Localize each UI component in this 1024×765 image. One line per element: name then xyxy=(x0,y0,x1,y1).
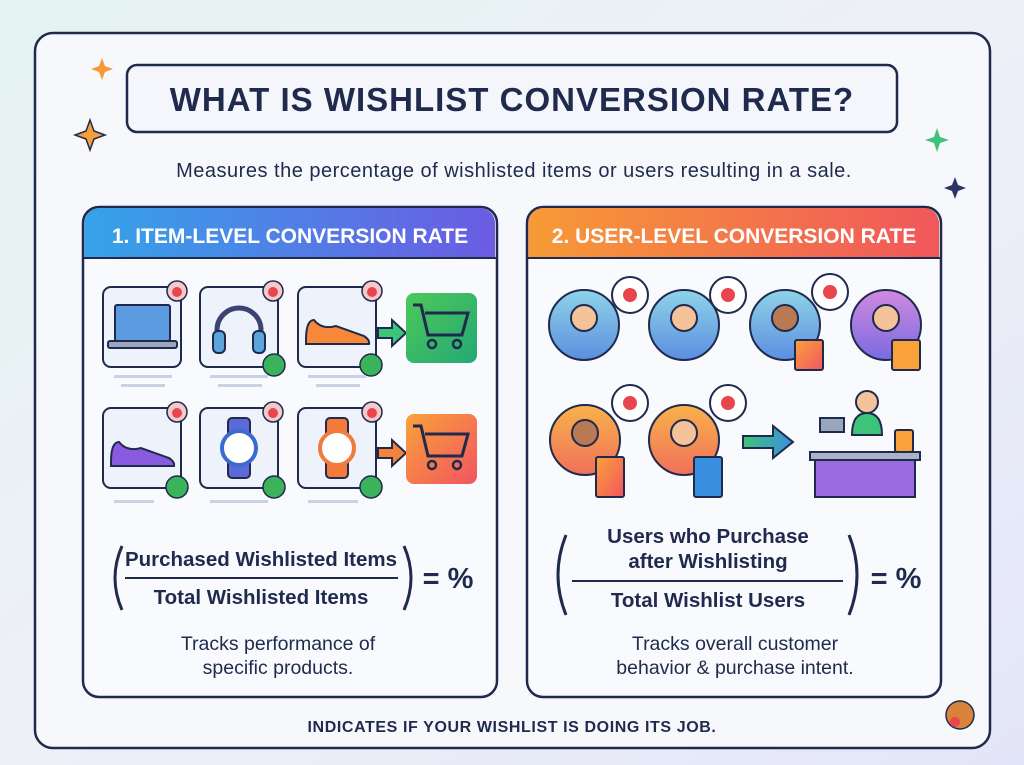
decorative sparkle: navy xyxy=(944,177,966,199)
description: user-level: behavior & purchase intent. xyxy=(616,657,854,679)
product row 2 xyxy=(103,402,477,503)
formula: user-level: Total Wishlist Users xyxy=(611,589,805,612)
panel: user-level xyxy=(527,207,941,697)
formula: item-level: = % xyxy=(423,563,474,595)
formula: user-level xyxy=(558,525,922,615)
panel header: item-level: 1. ITEM-LEVEL CONVERSION RATE xyxy=(112,225,468,248)
panel header: user-level: 2. USER-LEVEL CONVERSION RATE xyxy=(552,225,916,248)
description: item-level: Tracks performance of xyxy=(181,633,375,655)
decorative sparkle: green xyxy=(925,128,949,152)
title box xyxy=(127,65,897,132)
decorative sparkle: orange xyxy=(91,58,113,80)
decorative sparkle: large orange xyxy=(75,120,105,150)
title box: WHAT IS WISHLIST CONVERSION RATE? xyxy=(170,81,854,118)
description: item-level: specific products. xyxy=(203,657,353,679)
formula: user-level: = % xyxy=(871,563,922,595)
icon: squirrel mascot xyxy=(946,701,974,729)
panel header: user-level xyxy=(528,208,940,258)
footer: INDICATES IF YOUR WISHLIST IS DOING ITS JOB. xyxy=(308,719,716,736)
subtitle: Measures the percentage of wishlisted items or users resulting in a sale. xyxy=(176,160,852,182)
users row 1 xyxy=(549,274,921,370)
panel header: item-level xyxy=(84,208,496,258)
formula: item-level xyxy=(115,546,474,610)
users row 2 and checkout xyxy=(550,385,920,497)
formula: user-level: after Wishlisting xyxy=(628,550,788,573)
description: user-level: Tracks overall customer xyxy=(632,633,838,655)
formula: item-level: Purchased Wishlisted Items xyxy=(125,548,397,571)
product row 1 xyxy=(103,281,477,387)
formula: user-level: Users who Purchase xyxy=(607,525,809,548)
panel: item-level xyxy=(83,207,497,697)
formula: item-level: Total Wishlisted Items xyxy=(154,586,368,609)
